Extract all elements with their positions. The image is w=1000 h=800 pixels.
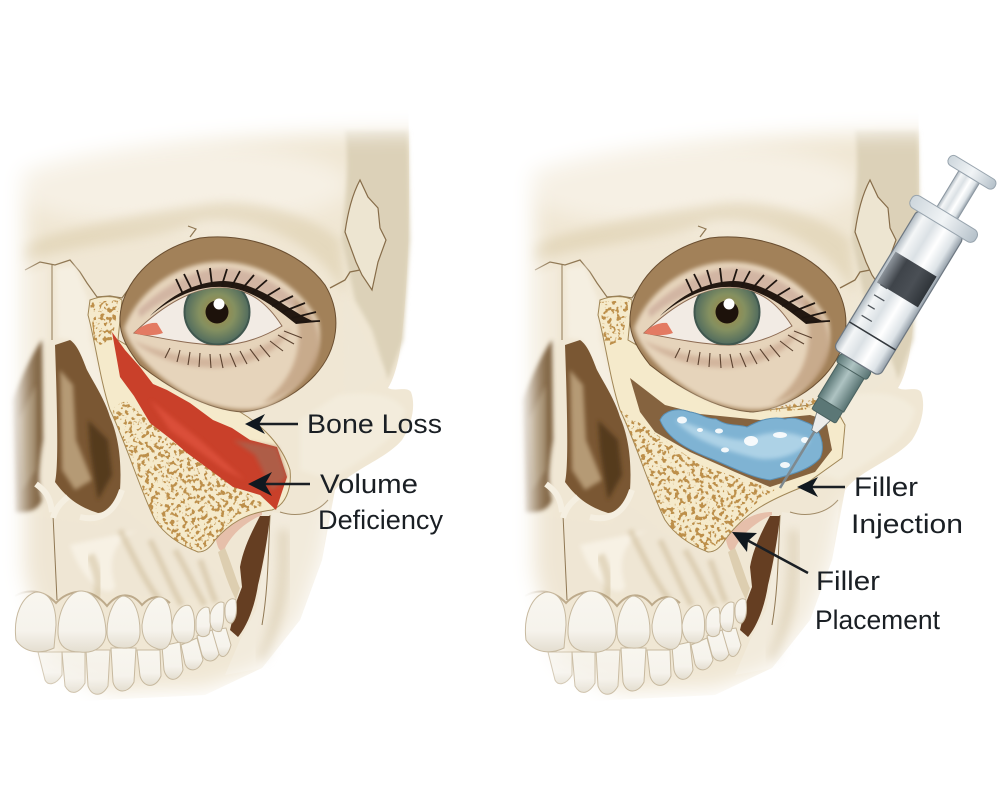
cavity behind the filler — [630, 378, 832, 487]
graduation marks — [862, 285, 891, 321]
plunger stopper — [877, 252, 937, 307]
label: Bone Loss with arrow: Bone Loss — [307, 409, 442, 439]
panel: before, bone loss and volume deficiency — [0, 90, 413, 705]
plunger top — [946, 154, 998, 191]
eye and orbit — [630, 237, 846, 412]
label: Volume Deficiency with arrow: Deficiency — [318, 505, 444, 535]
label: Volume Deficiency with arrow: Volume — [320, 469, 418, 499]
skull teeth — [525, 591, 747, 694]
hub — [808, 353, 872, 426]
eye and orbit — [120, 237, 336, 412]
label: Filler Placement with arrow — [732, 532, 940, 635]
syringe — [748, 148, 1000, 508]
label: Volume Deficiency with arrow — [248, 469, 444, 535]
nasal cavity — [12, 340, 122, 518]
panel: after, filler injection and placement — [510, 90, 1000, 705]
label: Filler Injection with arrow — [797, 472, 963, 539]
needle — [780, 430, 815, 488]
label: Filler Injection with arrow: Injection — [851, 509, 963, 539]
label: Bone Loss with arrow — [245, 409, 442, 439]
red volume deficiency area — [112, 332, 287, 510]
skull bone base — [510, 90, 923, 705]
blue filler deposit — [660, 410, 822, 480]
nasal cavity — [522, 340, 632, 518]
label: Filler Placement with arrow: Filler — [816, 566, 880, 596]
plunger rod — [935, 171, 979, 223]
label: Filler Injection with arrow: Filler — [854, 472, 918, 502]
cut bone cross-section — [88, 297, 290, 552]
barrel — [833, 209, 964, 376]
cut bone cross-section — [598, 297, 845, 552]
skull teeth — [15, 591, 237, 694]
barrel flange — [908, 193, 980, 245]
skull bone base — [0, 90, 413, 705]
label: Filler Placement with arrow: Placement — [815, 605, 940, 635]
